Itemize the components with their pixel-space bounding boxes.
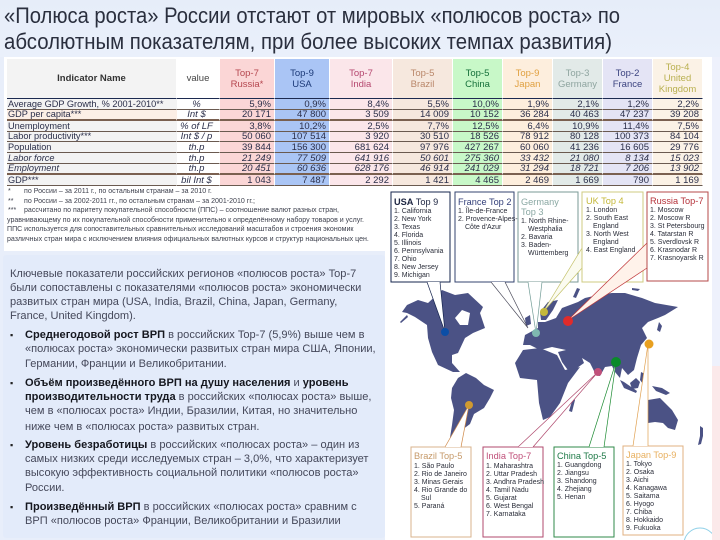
indicator table: Germany: [558, 78, 597, 90]
callout: UK Top-4: 4. East England: [586, 247, 636, 254]
callout: Russia Top-7: 7. Krasnoyarsk R: [650, 255, 704, 262]
callout: Russia Top-7: Russia Top-7: [650, 196, 703, 206]
callout: Russia Top-7: 6. Krasnodar R: [650, 247, 697, 254]
callout: Brazil Top-5: Brazil Top-5: [414, 451, 462, 461]
indicator table: Top-5: [466, 68, 489, 78]
callout: Japan Top-9: [623, 344, 683, 535]
callout: Brazil Top-5: Sul: [421, 495, 432, 502]
panel: key findings text: Среднегодовой рост ВРП в российских Top-7 (5,9%) выше чем в: [25, 329, 364, 341]
panel: key findings text: «полюсах роста» экономически развитых стран мира США, Японии,: [25, 343, 376, 355]
callout: UK Top-4: 3. North West: [586, 231, 629, 238]
panel: key findings text: Уровень безработицы в российских «полюсах роста» – один из: [25, 439, 359, 451]
footnotes: по России – за 2011 г., по остальным странам – за 2010 г.: [24, 188, 212, 195]
world map landmasses: [400, 288, 703, 445]
panel: table background: [4, 57, 712, 251]
callout: India Top-7: India Top-7: [486, 451, 531, 461]
callout: Germany Top-3: [518, 192, 578, 333]
indicator table: Top-9: [516, 68, 539, 78]
indicator table: Top-9: [290, 68, 314, 78]
callout: Brazil Top-5: 3. Minas Gerais: [414, 479, 464, 486]
indicator table: Top-3: [566, 68, 589, 78]
footnotes: **: [8, 198, 14, 205]
callout: France Top-2: France Top 2: [458, 197, 511, 207]
title: «Полюса роста» России отстают от мировых «полюсов роста» по: [4, 3, 620, 28]
footnotes: ППС используется для сопоставительных сравнительных исследований масштабов и строения экономик: [7, 226, 354, 233]
panel: key findings text: ниже чем в «полюсах роста» развитых стран.: [25, 421, 259, 433]
callout: Russia Top-7: 1. Moscow: [650, 207, 684, 214]
callout: Germany Top-3: Westphalia: [528, 226, 563, 233]
callout: France Top-2: 2. Provence-Alpes-: [458, 216, 518, 223]
panel: key findings text: France, United Kingdom).: [10, 310, 136, 322]
footnotes: уравнивающему по их покупательной способности применительно к определённому набору товаров и услуг.: [7, 217, 364, 224]
callout: Russia Top-7: 5. Sverdlovsk R: [650, 239, 699, 246]
callout: France Top-2: Côte d'Azur: [465, 224, 502, 231]
corner arc decoration: [684, 528, 716, 540]
panel: key findings text: [3, 255, 385, 538]
callout: USA Top-9: 4. Florida: [394, 232, 423, 239]
callout: China Top-5: 1. Guangdong: [557, 462, 601, 469]
callout: USA Top-9: USA Top 9: [394, 197, 438, 207]
callout: India Top-7: 1. Maharashtra: [486, 463, 533, 470]
title: [0, 0, 720, 57]
indicator table: United: [664, 73, 691, 84]
panel: key findings text: развитых стран мира (USA, India, Brazil, China, Japan, Germany,: [10, 296, 337, 308]
callout: Brazil Top-5: 5. Paraná: [414, 503, 444, 510]
panel: key findings text: чем в «полюсах роста» Индии, Бразилии, Китая, но значительно: [25, 405, 357, 417]
panel: key findings text: ▪: [10, 502, 13, 512]
callout: India Top-7: 6. West Bengal: [486, 503, 534, 510]
callout: China Top-5: 2. Jiangsu: [557, 470, 589, 477]
callout: Germany Top-3: 2. Bavaria: [521, 234, 553, 241]
callout: Russia Top-7: 3. St Petersbourg: [650, 223, 705, 230]
callout: USA Top-9: [391, 192, 450, 332]
callout: China Top-5: 5. Henan: [557, 494, 586, 501]
callout: Brazil Top-5: 2. Rio de Janeiro: [414, 471, 467, 478]
panel: key findings text: ▪: [10, 330, 13, 340]
callout: USA Top-9: 2. New York: [394, 216, 432, 223]
callout: Japan Top-9: 7. Chiba: [626, 509, 652, 516]
panel: key findings text: Объём произведённого ВРП на душу населения и уровень: [25, 377, 349, 389]
callout: Japan Top-9: 3. Aichi: [626, 477, 649, 484]
callout: USA Top-9: 3. Texas: [394, 224, 420, 231]
callout: Germany Top-3: 3. Baden-: [521, 242, 552, 249]
indicator table: China: [465, 78, 490, 90]
callout: Japan Top-9: 2. Osaka: [626, 469, 654, 476]
indicator table: Top-7: [235, 68, 259, 78]
callout: USA Top-9: 6. Pennsylvania: [394, 248, 444, 255]
indicator table: Top-5: [411, 68, 434, 78]
indicator table: Top-4: [666, 62, 689, 73]
panel: world map with callouts: [385, 192, 712, 540]
callout: UK Top-4: 2. South East: [586, 215, 628, 222]
callout: UK Top-4: England: [593, 239, 619, 246]
callout: USA Top-9: 1. California: [394, 208, 431, 215]
panel: right edge strip: [712, 57, 720, 540]
panel: key findings text: были сопоставлены с показателями «полюсов роста» экономически: [10, 282, 361, 294]
callout: India Top-7: 4. Tamil Nadu: [486, 487, 529, 494]
panel: key findings text: ВРП «полюсов роста» Франции, Великобритании и Бразилии: [25, 515, 341, 527]
callout: USA Top-9: 5. Illinois: [394, 240, 422, 247]
callout: Germany Top-3: Germany: [521, 197, 559, 207]
callout: China Top-5: 3. Shandong: [557, 478, 597, 485]
callout: Germany Top-3: Top 3: [521, 207, 543, 217]
callout: France Top-2: 1. Île-de-France: [458, 206, 508, 215]
footnotes: рассчитано по паритету покупательной способности (ППС) – соотношение валют разных стран,: [24, 207, 339, 214]
panel: key findings text: Германии, Франции и Великобритании.: [25, 358, 227, 370]
indicator table: France: [613, 78, 642, 90]
callout: USA Top-9: 7. Ohio: [394, 256, 417, 263]
footnotes: *: [8, 188, 11, 195]
callout: UK Top-4: UK Top 4: [586, 196, 624, 206]
callout: China Top-5: China Top-5: [557, 451, 606, 461]
callout: USA Top-9: 8. New Jersey: [394, 264, 439, 271]
callout: China Top-5: 4. Zhejiang: [557, 486, 592, 493]
callout: Russia Top-7: [567, 192, 708, 321]
callout: Brazil Top-5: [411, 405, 471, 537]
callout: Russia Top-7: 2. Moscow R: [650, 215, 690, 222]
title: абсолютным показателям, при более высоких темпах развития): [4, 29, 612, 54]
callout: Japan Top-9: 8. Hokkaido: [626, 517, 663, 524]
callout: India Top-7: 7. Karnataka: [486, 511, 526, 518]
indicator table: [7, 59, 703, 186]
callout: China Top-5: [554, 362, 616, 537]
indicator table: value: [187, 73, 209, 84]
callout: UK Top-4: [543, 192, 643, 312]
indicator table: Top-7: [349, 68, 373, 78]
callout: India Top-7: [483, 372, 598, 537]
panel: key findings text: самых низких среди исследуемых стран – 3,0%, что характеризует: [25, 453, 368, 465]
indicator table: Brazil: [411, 78, 434, 90]
callout: Japan Top-9: Japan Top-9: [626, 450, 676, 460]
indicator table: USA: [292, 78, 312, 90]
indicator table: Top-2: [616, 68, 639, 78]
callout: France Top-2: [455, 192, 528, 328]
callout: Germany Top-3: 1. North Rhine-: [521, 218, 569, 225]
callout: Brazil Top-5: 4. Rio Grande do: [414, 487, 467, 494]
callout: Japan Top-9: 9. Fukuoka: [626, 525, 661, 532]
panel: key findings text: высокую эффективность социальной политики «полюсов роста»: [25, 467, 359, 479]
callout: Russia Top-7: 4. Tatarstan R: [650, 231, 693, 238]
panel: key findings text: Ключевые показатели российских регионов «полюсов роста» Top-7: [10, 268, 356, 280]
panel: key findings text: Произведённый ВРП в российских «полюсах роста» сравним с: [25, 501, 357, 513]
callout: Brazil Top-5: 1. São Paulo: [414, 463, 454, 470]
callout: USA Top-9: 9. Michigan: [394, 272, 430, 279]
indicator table: India: [351, 78, 371, 90]
callout: UK Top-4: England: [593, 223, 619, 230]
callout: Germany Top-3: Württemberg: [528, 250, 569, 257]
callout: Japan Top-9: 4. Kanagawa: [626, 485, 667, 492]
callout: India Top-7: 5. Gujarat: [486, 495, 517, 502]
panel: key findings text: ▪: [10, 378, 13, 388]
indicator table: Indicator Name: [57, 73, 126, 84]
callout: Japan Top-9: 1. Tokyo: [626, 461, 652, 468]
footnotes: [7, 188, 369, 243]
map location pins: [441, 308, 654, 409]
indicator table: Japan: [515, 78, 540, 90]
callout: India Top-7: 3. Andhra Pradesh: [486, 479, 544, 486]
callout: India Top-7: 2. Uttar Pradesh: [486, 471, 537, 478]
callout: Japan Top-9: 5. Saitama: [626, 493, 660, 500]
panel: key findings text: России.: [25, 482, 64, 494]
panel: key findings text: производительности труда в российских «полюсах роста» выше,: [25, 391, 371, 403]
callout: Japan Top-9: 6. Hyogo: [626, 501, 654, 508]
footnotes: различных стран мира с исключением влияния официальных валютных курсов и структур национальных цен.: [7, 236, 369, 243]
footnotes: по России – за 2002-2011 гг., по остальным странам – за 2001-2010 гг.;: [24, 198, 255, 205]
footnotes: ***: [8, 207, 16, 214]
panel: key findings text: ▪: [10, 440, 13, 450]
callout: UK Top-4: 1. London: [586, 207, 617, 214]
indicator table: Russia*: [231, 78, 263, 90]
indicator table: Kingdom: [659, 84, 696, 95]
